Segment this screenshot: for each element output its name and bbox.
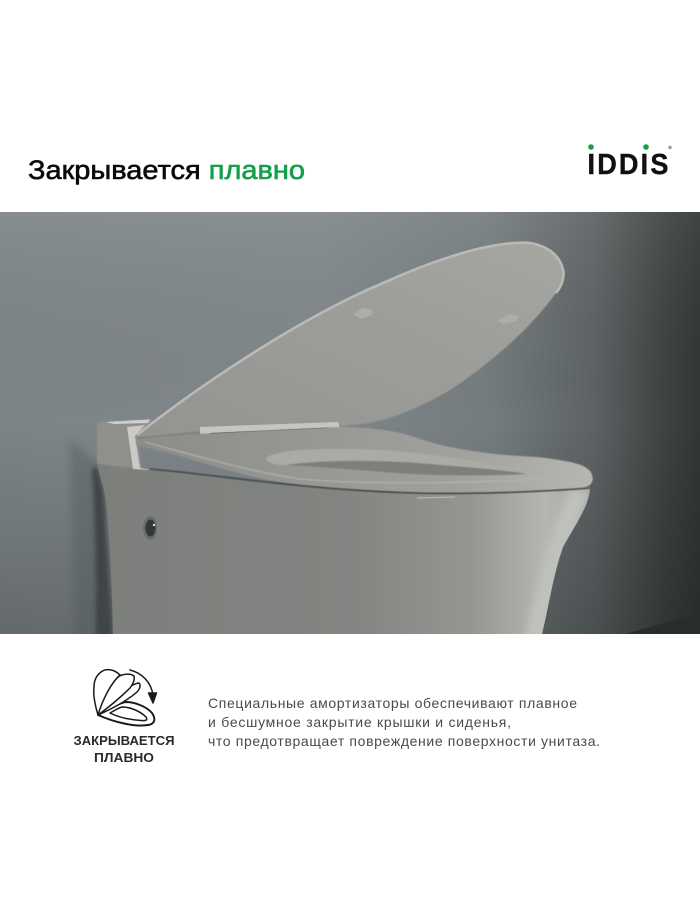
lid position: open bbox=[94, 670, 120, 715]
seat outline bbox=[98, 702, 154, 726]
lid position: middle bbox=[98, 674, 134, 715]
floor corner bbox=[626, 622, 667, 634]
seat shadow line bbox=[150, 469, 590, 493]
infographic canvas bbox=[0, 144, 700, 762]
open lid bbox=[135, 243, 564, 437]
flush button bbox=[143, 516, 157, 540]
product photo: toilet with soft-close lid bbox=[0, 212, 700, 640]
icon label: ПЛАВНО bbox=[94, 750, 154, 765]
description text: и бесшумное закрытие крышки и сиденья, bbox=[208, 714, 511, 730]
icon label: ЗАКРЫВАЕТСЯ bbox=[74, 733, 174, 748]
toilet shadow on wall bbox=[70, 440, 113, 640]
lid position: low bbox=[98, 683, 140, 715]
icon: soft-close seat bbox=[94, 670, 156, 726]
logo: IDDIS: IDDIS bbox=[588, 148, 671, 180]
wall background bbox=[0, 212, 700, 634]
bowl rim highlight bbox=[417, 497, 455, 498]
lid bumpers bbox=[353, 308, 373, 319]
description text bbox=[208, 695, 600, 749]
toilet seat bbox=[136, 427, 593, 494]
hinge bar bbox=[200, 422, 340, 435]
toilet bowl body bbox=[95, 460, 595, 640]
icon label bbox=[74, 733, 174, 765]
arrow bbox=[130, 670, 153, 695]
lid rim bbox=[137, 243, 564, 435]
bowl highlight bbox=[525, 490, 590, 640]
tank cover bbox=[97, 419, 152, 470]
description text: Специальные амортизаторы обеспечивают плавное bbox=[208, 695, 577, 711]
description text: что предотвращает повреждение поверхности унитаза. bbox=[208, 733, 600, 749]
seat opening bbox=[266, 449, 466, 466]
seat edge highlight bbox=[144, 442, 504, 484]
title: Закрывается плавно bbox=[28, 155, 305, 185]
